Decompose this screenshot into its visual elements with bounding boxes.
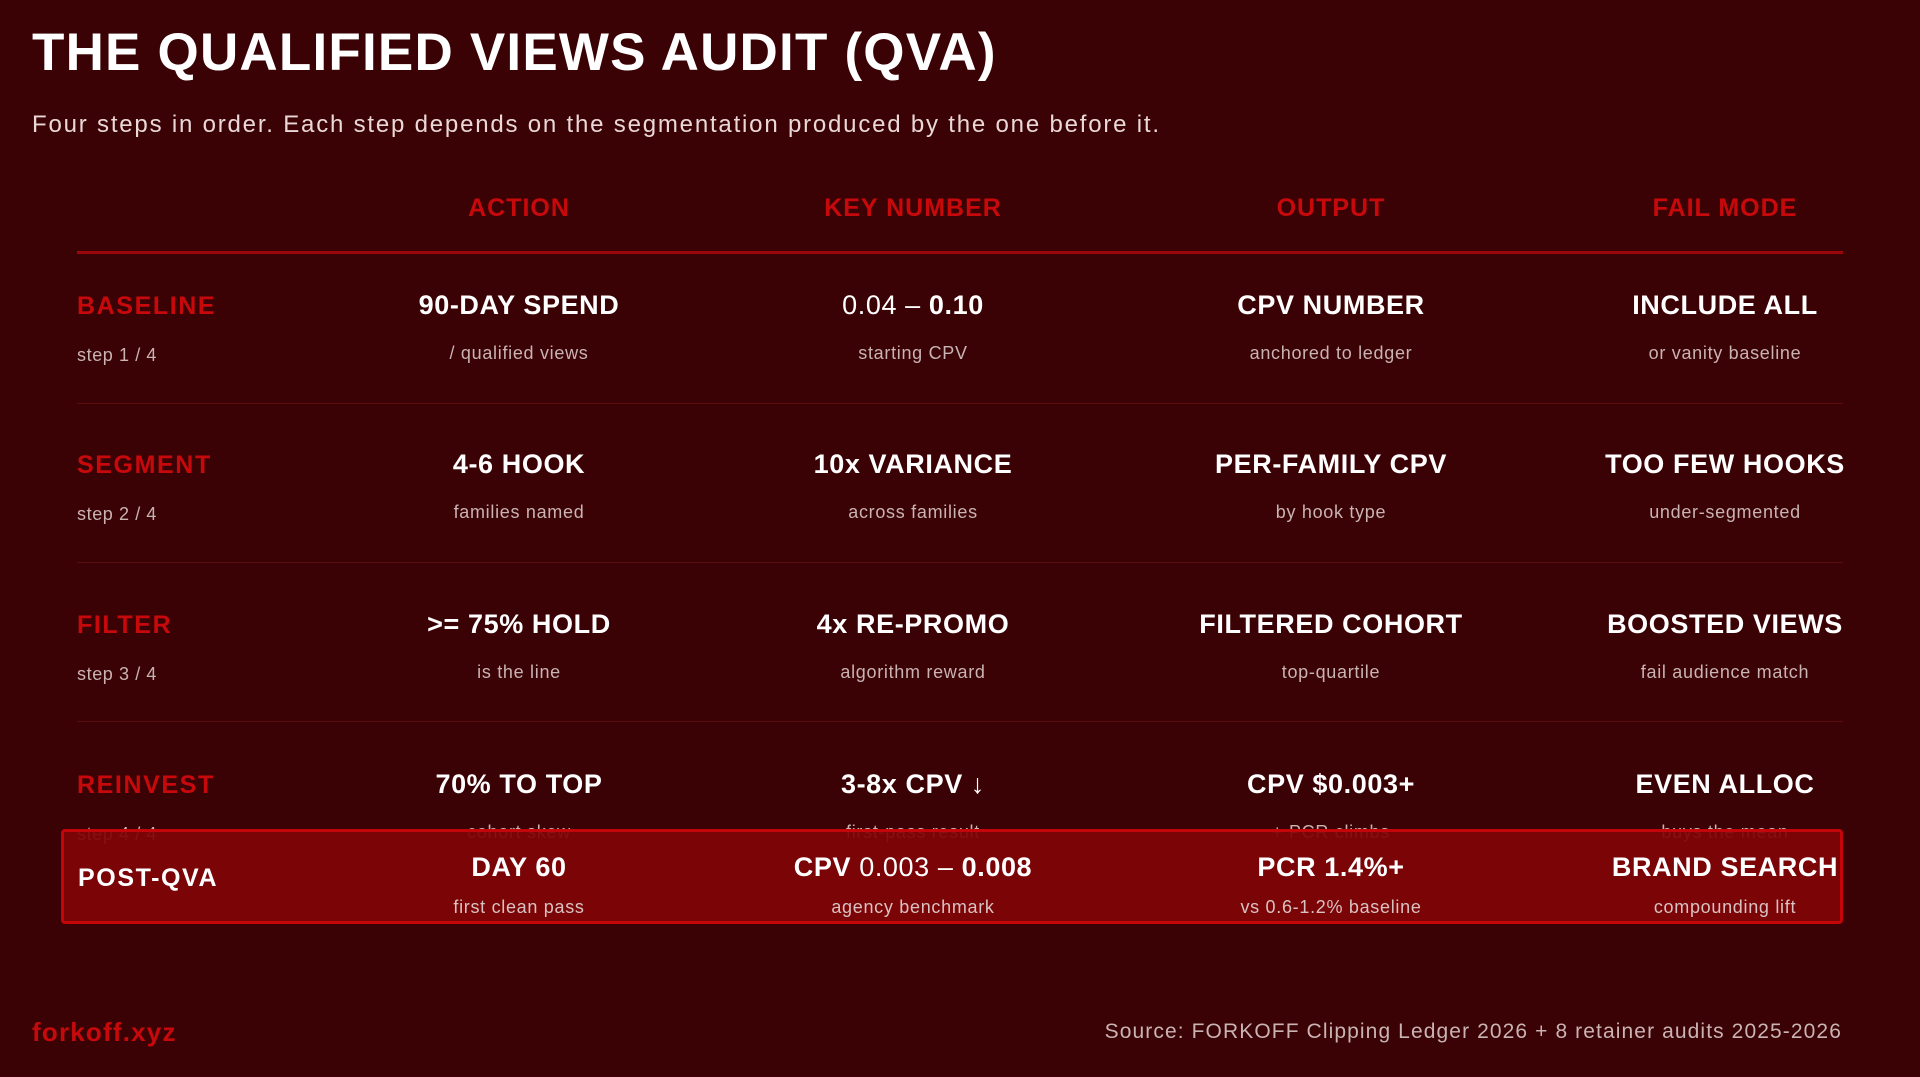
cell: day 60: DAY 60 (471, 852, 567, 882)
cell: key number: first-pass result (846, 822, 980, 842)
label: baseline: BASELINE (77, 292, 216, 320)
cell: fail mode: EVEN ALLOC (1635, 769, 1814, 799)
cell: action (435, 769, 603, 842)
cell: output (1237, 290, 1425, 363)
title: THE QUALIFIED VIEWS AUDIT (QVA) (32, 23, 997, 82)
cell: output: top-quartile (1282, 662, 1380, 682)
cell: action (427, 609, 611, 682)
cell: fail mode (1607, 609, 1843, 682)
label: reinvest: REINVEST (77, 771, 215, 799)
cell: action: 90-DAY SPEND (419, 290, 619, 320)
cell: output (1215, 449, 1447, 522)
cell: key number: algorithm reward (840, 662, 986, 682)
cell: brand search: compounding lift (1654, 897, 1796, 917)
cell: day 60: first clean pass (453, 897, 585, 917)
row: reinvest (77, 769, 1814, 844)
cell: output: by hook type (1276, 502, 1386, 522)
cell: key number: starting CPV (858, 343, 968, 363)
cell: action: cohort skew (467, 822, 571, 842)
step 1: step 1 / 4 (77, 345, 157, 365)
cell: fail mode: fail audience match (1641, 662, 1809, 682)
cell: fail mode: INCLUDE ALL (1632, 290, 1818, 320)
cell: output: CPV NUMBER (1237, 290, 1425, 320)
cell: fail mode (1632, 290, 1818, 363)
cell: fail mode: under-segmented (1649, 502, 1801, 522)
cell: cpv benchmark (794, 852, 1032, 917)
cell: key number: 10x VARIANCE (814, 449, 1012, 479)
row: segment (77, 449, 1845, 524)
cell: key number: 0.04 – 0.10 (842, 290, 984, 320)
row: filter (77, 609, 1843, 684)
row: baseline (77, 290, 1818, 365)
cell: fail mode: or vanity baseline (1649, 343, 1801, 363)
step 2: step 2 / 4 (77, 504, 157, 524)
step 3: step 3 / 4 (77, 664, 157, 684)
cell: output: CPV $0.003+ (1247, 769, 1415, 799)
footer: source: Source: FORKOFF Clipping Ledger 2026 + 8 retainer audits 2025-2026 (1105, 1020, 1842, 1043)
header: key number: KEY NUMBER (824, 194, 1002, 222)
cell: key number (841, 769, 985, 842)
cell: pcr: vs 0.6-1.2% baseline (1240, 897, 1422, 917)
cell: action: is the line (477, 662, 561, 682)
cell: output: PER-FAMILY CPV (1215, 449, 1447, 479)
cell: pcr (1240, 852, 1422, 917)
header: fail mode: FAIL MODE (1653, 194, 1797, 222)
cell: fail mode (1605, 449, 1845, 522)
cell: key number (842, 290, 984, 363)
cell: fail mode: buys the mean (1661, 822, 1789, 842)
subtitle: Four steps in order. Each step depends on the segmentation produced by the one before it. (32, 111, 1161, 138)
cell: day 60 (453, 852, 585, 917)
cell: brand search: BRAND SEARCH (1612, 852, 1838, 882)
cell: key number: 4x RE-PROMO (817, 609, 1009, 639)
step 4: step 4 / 4 (77, 824, 157, 844)
cell: key number (814, 449, 1012, 522)
cell: cpv benchmark: CPV 0.003 – 0.008 (794, 852, 1032, 882)
cell: fail mode: TOO FEW HOOKS (1605, 449, 1845, 479)
cell: key number (817, 609, 1009, 682)
cell: key number: across families (848, 502, 978, 522)
footer: brand: forkoff.xyz (32, 1017, 177, 1047)
column headers (468, 194, 1797, 222)
label: segment: SEGMENT (77, 451, 212, 479)
label: post-qva: POST-QVA (78, 864, 218, 892)
cell: key number: 3-8x CPV ↓ (841, 769, 985, 799)
cell: fail mode (1635, 769, 1814, 842)
highlight box: post-QVA (61, 829, 1843, 924)
cell: output (1199, 609, 1463, 682)
label: filter: FILTER (77, 611, 172, 639)
cell: action: >= 75% HOLD (427, 609, 611, 639)
cell: output: + PCR climbs (1272, 822, 1390, 842)
cell: action (419, 290, 619, 363)
cell: action: 70% TO TOP (435, 769, 603, 799)
cell: brand search (1612, 852, 1838, 917)
cell: action: families named (454, 502, 584, 522)
header: action: ACTION (468, 194, 570, 222)
cell: output (1247, 769, 1415, 842)
cell: action (453, 449, 585, 522)
cell: pcr: PCR 1.4%+ (1257, 852, 1405, 882)
cell: cpv benchmark: agency benchmark (831, 897, 995, 917)
cell: output: anchored to ledger (1250, 343, 1412, 363)
cell: fail mode: BOOSTED VIEWS (1607, 609, 1843, 639)
header: output: OUTPUT (1277, 194, 1385, 222)
cell: output: FILTERED COHORT (1199, 609, 1463, 639)
cell: action: / qualified views (450, 343, 588, 363)
cell: action: 4-6 HOOK (453, 449, 585, 479)
